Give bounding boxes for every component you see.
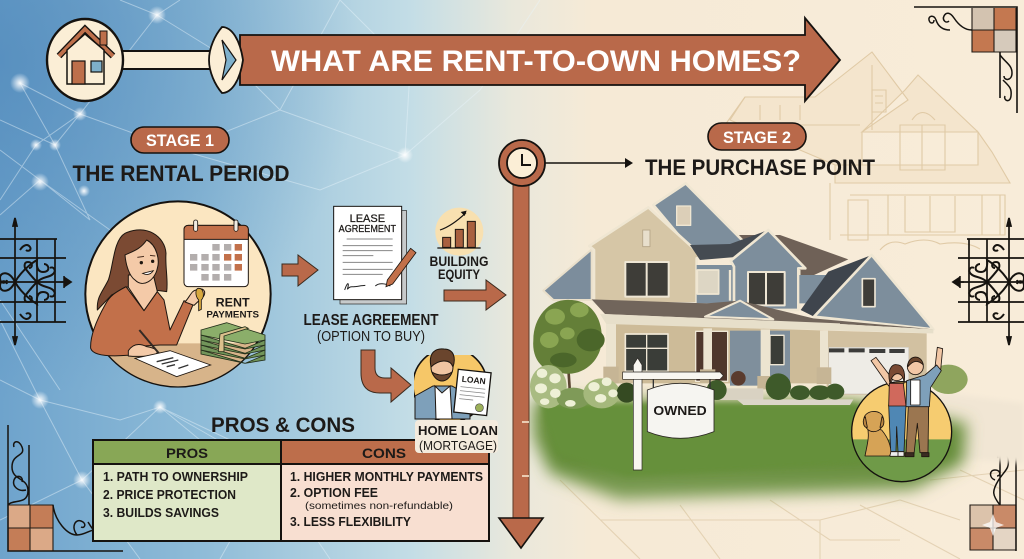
cons column: 3. LESS FLEXIBILITY [290, 514, 411, 529]
blueprint lines [560, 470, 1024, 559]
label box: home loan: (MORTGAGE) [419, 438, 497, 453]
tree [533, 300, 605, 393]
background sketch of house [725, 52, 1010, 250]
label box: home loan [415, 420, 498, 453]
timeline arrow with clock [499, 140, 633, 548]
rear gable [653, 183, 743, 257]
clock [499, 140, 545, 186]
rent payments label: RENT [216, 296, 250, 310]
steps [720, 388, 763, 400]
document title: LEASE [350, 213, 385, 225]
pros column [94, 441, 281, 540]
gate ornament right [953, 218, 1024, 345]
arrow: equity to timeline [444, 280, 506, 310]
owned sign: OWNED [653, 403, 707, 418]
title: WHAT ARE RENT-TO-OWN HOMES? [271, 45, 801, 78]
table: pros and cons [93, 440, 489, 541]
porch gable [705, 301, 773, 319]
house [543, 183, 933, 405]
lawn [533, 400, 967, 500]
loan document: LOAN [461, 374, 486, 386]
stone gable [589, 207, 703, 303]
driveway [847, 393, 1024, 463]
panel: rental illustration [83, 201, 271, 393]
panel: lease document [334, 206, 416, 304]
lawn solid core [540, 403, 937, 477]
label box: home loan: HOME LOAN [418, 423, 498, 438]
pros column: 3. BUILDS SAVINGS [103, 505, 219, 520]
heading: the purchase point: THE PURCHASE POINT [645, 155, 876, 180]
icon: building equity chart [435, 208, 483, 256]
icon: chevron connector [209, 27, 243, 93]
right dark roof [801, 255, 872, 317]
timeline arrowhead [499, 518, 543, 548]
label: building: BUILDING [430, 254, 488, 269]
cons column: 2. OPTION FEE [290, 485, 378, 500]
heading: pros and cons: PROS & CONS [211, 414, 355, 437]
table [110, 343, 256, 386]
man [905, 347, 943, 457]
cons column [281, 441, 489, 540]
stage 1 pill [131, 127, 229, 153]
chevron inner [222, 40, 236, 80]
center gable [731, 230, 805, 310]
signature [345, 284, 390, 290]
label: lease agreement: LEASE AGREEMENT [304, 312, 439, 329]
woman figure [91, 230, 205, 356]
stage 1 pill: STAGE 1 [146, 131, 214, 150]
porch fascia [600, 314, 840, 331]
shrubs [707, 365, 968, 400]
pen in hand [139, 330, 162, 357]
title banner arrow [47, 18, 840, 101]
corner ornament top right [914, 7, 1017, 113]
keys [196, 288, 203, 311]
banner arrow shape [240, 18, 840, 101]
lower roof [592, 299, 933, 329]
man [415, 349, 470, 419]
stage 2 pill [708, 123, 806, 150]
corner ornament bottom left [8, 425, 123, 551]
panel: house photo scene [530, 183, 1024, 500]
middle dark roof [690, 230, 768, 260]
panel: home loan illustration [413, 348, 491, 422]
porch wall [607, 324, 828, 383]
woman circle [85, 201, 271, 387]
hydrangea bushes [530, 365, 637, 409]
heading: the rental period: THE RENTAL PERIOD [72, 161, 290, 186]
pointer line to stage 2 [545, 162, 626, 164]
stage 2 pill: STAGE 2 [723, 128, 791, 147]
paper on table [135, 351, 211, 377]
woman [871, 357, 906, 456]
panel: rental illustration: PAYMENTS [206, 310, 259, 320]
money stack [201, 323, 265, 363]
couple badge [850, 347, 953, 483]
pros column: 1. PATH TO OWNERSHIP [103, 469, 248, 484]
gate ornament left [0, 218, 71, 345]
corner ornament bottom right [970, 425, 1016, 551]
arrow: lease to home loan [361, 350, 411, 402]
left wing [543, 249, 592, 300]
rear roof [720, 235, 848, 278]
icon: house badge [47, 19, 218, 101]
columns [606, 324, 828, 376]
arrow: rent to lease [282, 255, 318, 286]
owned sign [623, 358, 723, 470]
middle siding [697, 265, 733, 303]
label: option to buy: (OPTION TO BUY) [317, 328, 425, 345]
garage wall [827, 331, 927, 395]
label: equity: EQUITY [438, 267, 480, 282]
cons column: 1. HIGHER MONTHLY PAYMENTS [290, 469, 483, 484]
calendar [184, 220, 248, 287]
garage door [829, 347, 909, 394]
face details [137, 255, 155, 275]
pros column: 2. PRICE PROTECTION [103, 487, 236, 502]
pen [386, 248, 416, 287]
right siding strip [799, 275, 828, 303]
panel: lease document: AGREEMENT [339, 224, 396, 235]
cons column: (sometimes non-refundable) [305, 500, 453, 512]
timeline shaft [513, 182, 529, 524]
dog [863, 411, 891, 456]
pros column: PROS [166, 445, 208, 461]
right gable [814, 255, 933, 329]
cons column: CONS [362, 445, 406, 461]
